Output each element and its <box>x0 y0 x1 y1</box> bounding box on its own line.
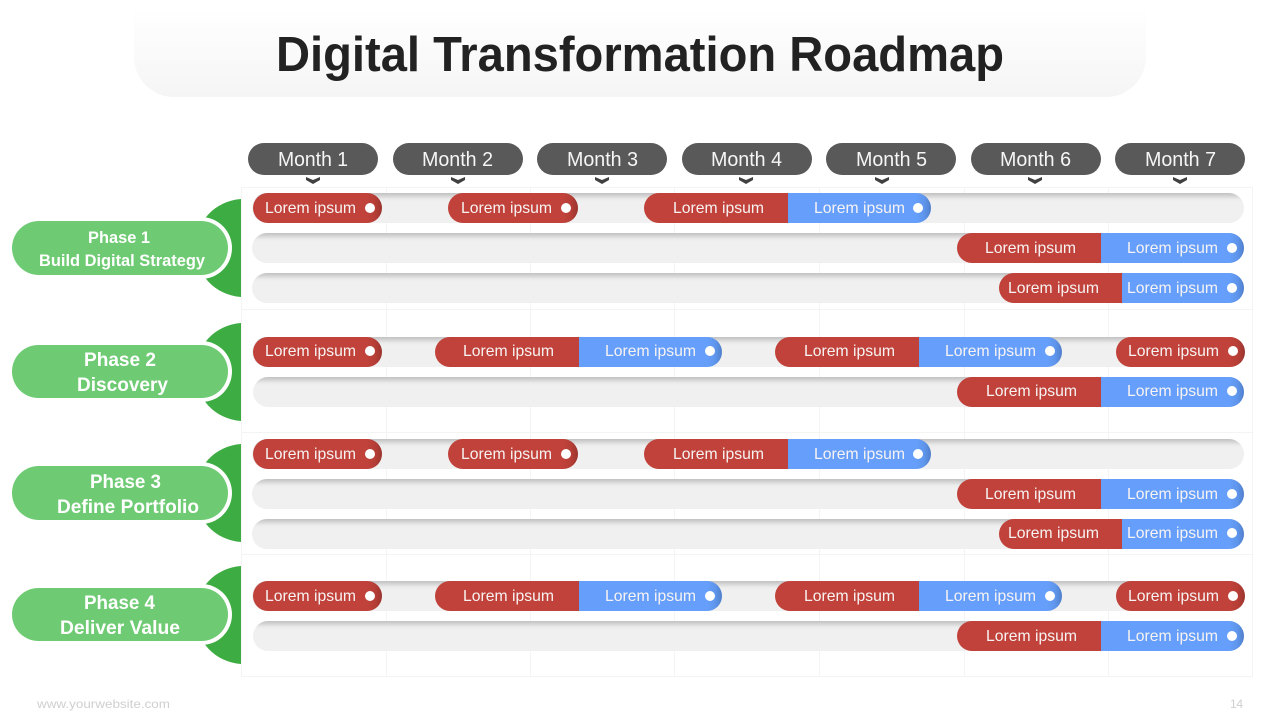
task bar pair: Lorem ipsum <box>1008 280 1099 297</box>
phase 4 <box>8 566 241 664</box>
task bar pair <box>957 233 1244 263</box>
month 3 <box>537 143 667 184</box>
task bar pair: Lorem ipsum <box>605 588 696 605</box>
task bar: Lorem ipsum <box>265 446 356 463</box>
task bar pair: Lorem ipsum <box>1127 280 1218 297</box>
phase 4: Phase 4 <box>84 592 155 614</box>
task bar pair: Lorem ipsum <box>814 446 905 463</box>
task bar pair: Lorem ipsum <box>1127 240 1218 257</box>
timeline row 6 <box>252 439 1244 469</box>
phase 2: Phase 2 <box>84 349 156 371</box>
month 4 <box>682 143 812 184</box>
page number: 14 <box>1230 697 1243 711</box>
task bar <box>448 193 578 223</box>
task bar <box>253 193 382 223</box>
task bar <box>253 337 382 367</box>
phase 1 <box>8 199 241 297</box>
task bar pair <box>775 337 1062 367</box>
title: Digital Transformation Roadmap <box>276 28 1004 82</box>
footer website: www.yourwebsite.com <box>36 697 170 711</box>
timeline row 9 <box>252 581 1245 611</box>
month 2: Month 2 <box>422 148 493 171</box>
task bar pair: Lorem ipsum <box>605 343 696 360</box>
task bar pair: Lorem ipsum <box>804 343 895 360</box>
task bar: Lorem ipsum <box>265 343 356 360</box>
task bar <box>253 439 382 469</box>
phase 1: Phase 1 <box>88 228 150 247</box>
task bar pair: Lorem ipsum <box>814 200 905 217</box>
timeline row 3 <box>252 273 1244 303</box>
roadmap grid <box>241 187 1253 677</box>
timeline row 4 <box>252 337 1245 367</box>
month 7 <box>1115 143 1245 184</box>
timeline row 10 <box>253 621 1244 651</box>
task bar pair: Lorem ipsum <box>986 383 1077 400</box>
task bar <box>253 581 382 611</box>
task bar pair: Lorem ipsum <box>1127 486 1218 503</box>
task bar: Lorem ipsum <box>1128 588 1219 605</box>
timeline row 2 <box>252 233 1244 263</box>
task bar pair <box>644 439 931 469</box>
task bar pair: Lorem ipsum <box>986 628 1077 645</box>
task bar pair <box>644 193 931 223</box>
task bar pair: Lorem ipsum <box>463 343 554 360</box>
month 5 <box>826 143 956 184</box>
phase 2: Discovery <box>77 374 168 396</box>
month 3: Month 3 <box>567 148 638 171</box>
title banner <box>134 8 1146 97</box>
task bar: Lorem ipsum <box>461 200 552 217</box>
timeline row 1 <box>252 193 1244 223</box>
task bar: Lorem ipsum <box>1128 343 1219 360</box>
phase labels <box>8 199 241 664</box>
task bar pair: Lorem ipsum <box>673 200 764 217</box>
phase 2 <box>8 323 241 421</box>
timeline row 7 <box>252 479 1244 509</box>
task bar <box>1116 581 1245 611</box>
task bar pair <box>435 337 722 367</box>
task bar pair: Lorem ipsum <box>945 343 1036 360</box>
task bar pair <box>999 519 1244 549</box>
task bar <box>1116 337 1245 367</box>
task bar pair: Lorem ipsum <box>1127 525 1218 542</box>
task bar: Lorem ipsum <box>265 588 356 605</box>
month 6: Month 6 <box>1000 148 1071 171</box>
task bar pair <box>999 273 1244 303</box>
task bar: Lorem ipsum <box>461 446 552 463</box>
month 7: Month 7 <box>1145 148 1216 171</box>
phase 1: Build Digital Strategy <box>39 251 206 270</box>
timeline row 8 <box>252 519 1244 549</box>
task bar pair: Lorem ipsum <box>673 446 764 463</box>
task bar pair <box>957 479 1244 509</box>
task bar pair <box>435 581 722 611</box>
task bar pair: Lorem ipsum <box>945 588 1036 605</box>
month 5: Month 5 <box>856 148 927 171</box>
task bar pair <box>775 581 1062 611</box>
task bar pair <box>957 621 1244 651</box>
month 1 <box>248 143 378 184</box>
task bar pair: Lorem ipsum <box>1008 525 1099 542</box>
task bar pair: Lorem ipsum <box>1127 383 1218 400</box>
month 4: Month 4 <box>711 148 782 171</box>
task bar pair <box>957 377 1244 407</box>
month 2 <box>393 143 523 184</box>
task bar pair: Lorem ipsum <box>1127 628 1218 645</box>
phase 3 <box>8 444 241 542</box>
task bar pair: Lorem ipsum <box>985 486 1076 503</box>
month 6 <box>971 143 1101 184</box>
phase 4: Deliver Value <box>60 617 180 639</box>
task bar pair: Lorem ipsum <box>804 588 895 605</box>
task bar <box>448 439 578 469</box>
task bar pair: Lorem ipsum <box>463 588 554 605</box>
month headers <box>248 143 1245 184</box>
phase 3: Phase 3 <box>90 471 161 493</box>
task bar: Lorem ipsum <box>265 200 356 217</box>
task bar pair: Lorem ipsum <box>985 240 1076 257</box>
month 1: Month 1 <box>278 148 348 171</box>
timeline row 5 <box>253 377 1244 407</box>
phase 3: Define Portfolio <box>57 496 199 518</box>
